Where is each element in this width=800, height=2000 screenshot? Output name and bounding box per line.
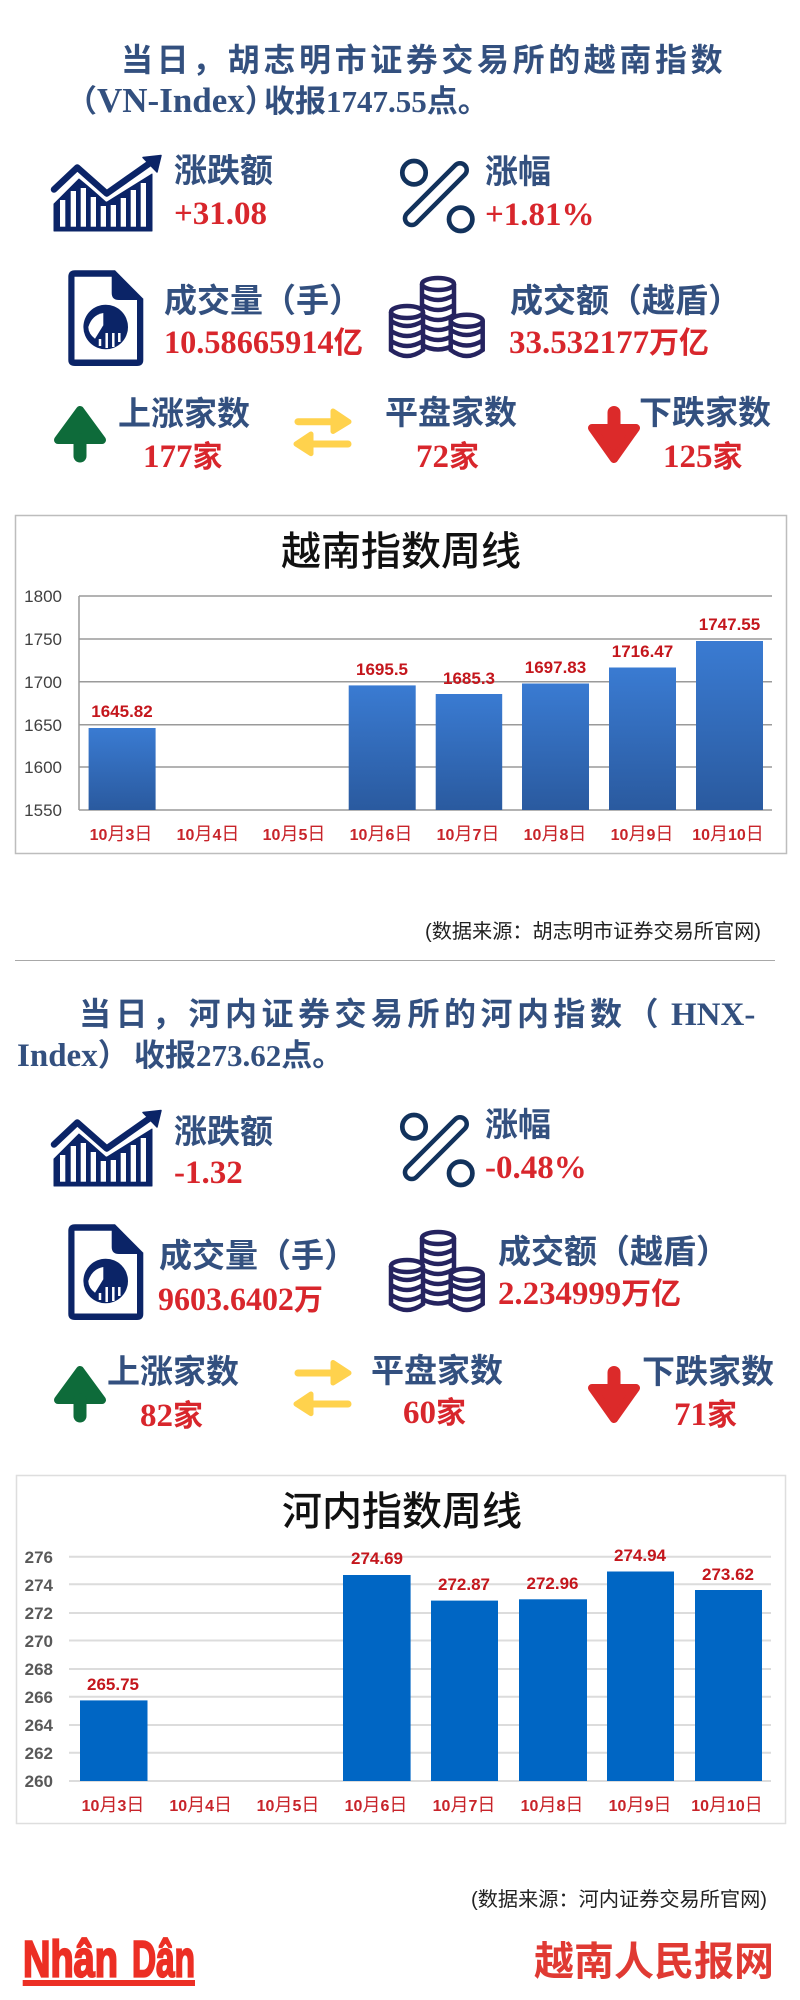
y axis and grid: 272 xyxy=(25,1604,53,1623)
stat: advancing stocks: 上涨家数 xyxy=(107,1354,239,1391)
y axis and grid: 1700 xyxy=(24,673,62,692)
section heading: VN-Index close: 当日，胡志明市证券交易所的越南指数 xyxy=(121,42,726,78)
x axis labels: 10月7日 xyxy=(433,1795,495,1815)
y axis and grid: 268 xyxy=(25,1660,53,1679)
icon: percent xyxy=(402,161,472,231)
stat: change amount: 涨跌额 xyxy=(174,1114,273,1151)
stat: unchanged stocks: 平盘家数 xyxy=(371,1353,503,1390)
stat: volume: 10.58665914亿 xyxy=(164,325,363,361)
x axis labels: 10月5日 xyxy=(263,824,325,844)
stat: advancing stocks: 177家 xyxy=(143,439,222,475)
stat: declining stocks: 125家 xyxy=(663,439,742,475)
data labels: 272.87 xyxy=(438,1575,490,1594)
stat: advancing stocks xyxy=(107,1354,239,1434)
section heading: VN-Index close: （VN-Index） xyxy=(66,81,276,120)
stat: declining stocks: 下跌家数 xyxy=(642,1354,774,1391)
icon: document with pie chart xyxy=(68,1224,143,1320)
x axis labels: 10月3日 xyxy=(82,1795,144,1815)
data labels xyxy=(91,615,760,721)
logo: Nhan Dan: Dân xyxy=(132,1930,195,1988)
stat: unchanged stocks: 72家 xyxy=(416,439,479,475)
x axis labels: 10月4日 xyxy=(177,824,239,844)
icon: document with pie chart xyxy=(68,270,143,366)
data labels: 274.69 xyxy=(351,1549,403,1568)
stat: change amount xyxy=(174,1114,273,1191)
x axis labels: 10月10日 xyxy=(691,1795,763,1815)
panel: VN-Index weekly chart xyxy=(16,516,786,854)
icon: yellow exchange arrows xyxy=(296,411,349,454)
section heading: HNX-Index close: Index） xyxy=(17,1038,129,1074)
stat: volume: 成交量（手） xyxy=(159,1238,357,1275)
data labels: 1716.47 xyxy=(612,642,673,661)
y axis and grid: 270 xyxy=(25,1632,53,1651)
y axis and grid: 1600 xyxy=(24,758,62,777)
section heading: VN-Index close xyxy=(66,42,726,120)
stat: change percent: -0.48% xyxy=(485,1150,587,1186)
y axis and grid: 260 xyxy=(25,1772,53,1791)
data labels: 272.96 xyxy=(526,1574,578,1593)
stat: volume: 成交量（手） xyxy=(164,283,362,320)
icon: red down arrow xyxy=(592,412,636,459)
bars xyxy=(80,1572,762,1781)
stat: declining stocks: 71家 xyxy=(674,1397,737,1433)
x axis labels: 10月3日 xyxy=(90,824,152,844)
stat: change percent xyxy=(485,1107,587,1186)
stat: unchanged stocks xyxy=(371,1353,503,1431)
data labels: 273.62 xyxy=(702,1565,754,1584)
y axis and grid: 1800 xyxy=(24,587,62,606)
stat: change amount: -1.32 xyxy=(174,1155,243,1191)
section heading: VN-Index close: 收报 xyxy=(264,84,326,119)
stat: unchanged stocks: 平盘家数 xyxy=(385,395,517,432)
x axis labels: 10月8日 xyxy=(521,1795,583,1815)
stat: change percent: 涨幅 xyxy=(485,154,551,191)
stat: change amount xyxy=(174,153,273,232)
y axis and grid: 1750 xyxy=(24,630,62,649)
section heading: HNX-Index close: 273.62点。 xyxy=(196,1038,343,1073)
data labels: 1685.3 xyxy=(443,669,495,688)
x axis labels: 10月5日 xyxy=(257,1795,319,1815)
y axis and grid xyxy=(24,587,772,820)
x axis labels: 10月6日 xyxy=(350,824,412,844)
stat: volume xyxy=(164,283,363,361)
icon: green up arrow xyxy=(58,410,102,456)
x axis labels xyxy=(90,824,764,844)
stat: unchanged stocks xyxy=(385,395,517,475)
stat: change percent: 涨幅 xyxy=(485,1107,551,1144)
section heading: HNX-Index close: HNX- xyxy=(671,997,755,1033)
data labels: 1747.55 xyxy=(699,615,760,634)
x axis labels: 10月9日 xyxy=(611,824,673,844)
y axis and grid: 276 xyxy=(25,1548,53,1567)
x axis labels: 10月4日 xyxy=(169,1795,232,1815)
data labels: 274.94 xyxy=(614,1546,667,1565)
stat: advancing stocks xyxy=(118,396,250,475)
stat: volume xyxy=(158,1238,357,1318)
data labels: 1697.83 xyxy=(525,658,586,677)
stat: advancing stocks: 82家 xyxy=(140,1398,203,1434)
x axis labels: 10月6日 xyxy=(345,1795,407,1815)
section heading: HNX-Index close: 收报 xyxy=(134,1038,196,1073)
x axis labels: 10月10日 xyxy=(692,824,764,844)
stat: change amount: +31.08 xyxy=(174,196,267,232)
panel: HNX-Index weekly chart xyxy=(16,1476,786,1824)
x axis labels: 10月8日 xyxy=(524,824,586,844)
stat: turnover: 成交额（越盾） xyxy=(498,1234,729,1271)
bars xyxy=(89,641,763,810)
stat: turnover: 成交额（越盾） xyxy=(510,283,741,320)
x axis labels: 10月7日 xyxy=(437,824,499,844)
icon: rising chart xyxy=(54,1110,161,1186)
icon: coin stacks xyxy=(391,278,483,356)
y axis and grid: 264 xyxy=(25,1716,54,1735)
stat: turnover xyxy=(498,1234,729,1312)
chart title: 河内指数周线 xyxy=(282,1490,522,1534)
stat: change percent xyxy=(485,154,595,233)
icon: red down arrow xyxy=(592,1372,636,1419)
stat: unchanged stocks: 60家 xyxy=(403,1395,466,1431)
y axis and grid: 262 xyxy=(25,1744,53,1763)
data labels xyxy=(87,1546,754,1694)
y axis and grid: 266 xyxy=(25,1688,53,1707)
source note: HOSE: (数据来源：胡志明市证券交易所官网) xyxy=(425,920,761,943)
stat: turnover: 33.532177万亿 xyxy=(509,325,709,361)
data labels: 1695.5 xyxy=(356,660,408,679)
icon: green up arrow xyxy=(58,1370,102,1416)
logo: Nhan Dan: Nhân xyxy=(23,1930,118,1988)
section heading: VN-Index close: 1747.55点。 xyxy=(326,84,489,119)
data labels: 265.75 xyxy=(87,1675,139,1694)
data labels: 1645.82 xyxy=(91,702,153,721)
brand name: 越南人民报网 xyxy=(534,1940,774,1984)
icon: percent xyxy=(402,1115,472,1185)
y axis and grid: 1550 xyxy=(24,801,62,820)
stat: declining stocks: 下跌家数 xyxy=(639,395,771,432)
x axis labels xyxy=(82,1795,763,1815)
stat: change amount: 涨跌额 xyxy=(174,153,273,190)
icon: rising chart xyxy=(54,156,161,231)
stat: change percent: +1.81% xyxy=(485,197,595,233)
y axis and grid: 1650 xyxy=(24,716,62,735)
source note: HNX: (数据来源：河内证券交易所官网) xyxy=(471,1888,767,1911)
stat: advancing stocks: 上涨家数 xyxy=(118,396,250,433)
section heading: HNX-Index close: 当日，河内证券交易所的河内指数（ xyxy=(79,996,663,1032)
chart title: 越南指数周线 xyxy=(281,530,521,574)
stat: turnover xyxy=(509,283,741,361)
icon: yellow exchange arrows xyxy=(296,1362,349,1414)
y axis and grid xyxy=(25,1548,771,1791)
stat: declining stocks xyxy=(639,395,771,475)
stat: volume: 9603.6402万 xyxy=(158,1282,323,1318)
icon: coin stacks xyxy=(391,1232,483,1310)
stat: declining stocks xyxy=(642,1354,774,1433)
stat: turnover: 2.234999万亿 xyxy=(498,1276,681,1312)
x axis labels: 10月9日 xyxy=(609,1795,671,1815)
y axis and grid: 274 xyxy=(25,1576,54,1595)
section heading: HNX-Index close xyxy=(17,996,755,1074)
